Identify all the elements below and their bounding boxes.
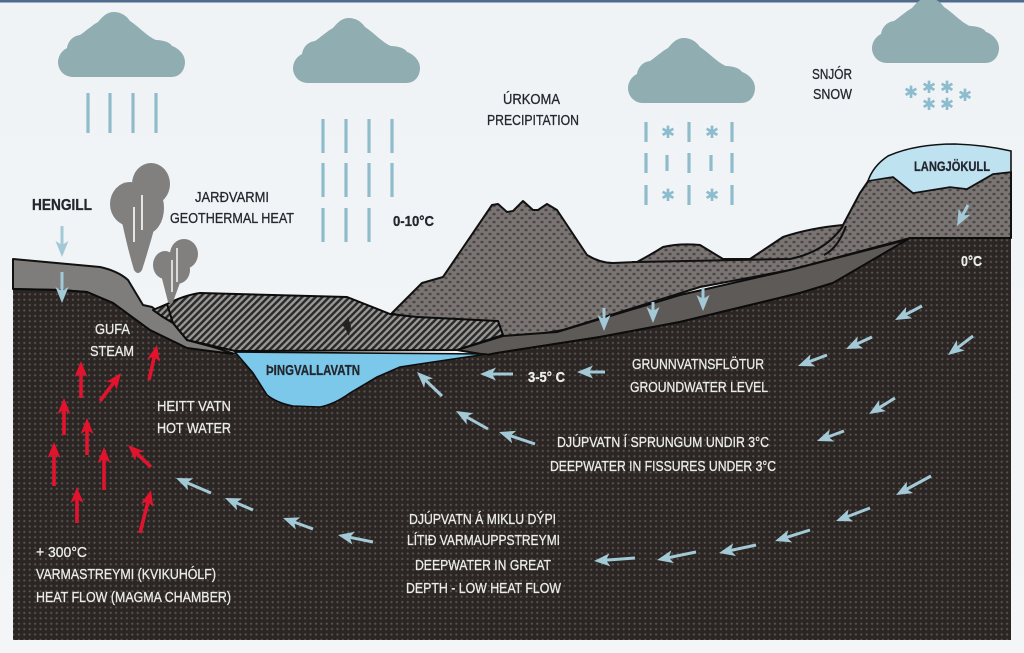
blue arrows: groundwater flow — [176, 306, 973, 561]
snowflakes under cloud 4: ✱ — [904, 83, 918, 103]
label: groundwater level: GRUNNVATNSFLÖTUR — [632, 355, 764, 373]
label: heat flow from magma chamber — [36, 544, 231, 606]
label: geothermal heat — [170, 189, 294, 227]
label: heat flow from magma chamber: HEAT FLOW (MAGMA CHAMBER) — [36, 589, 231, 606]
label: snow: SNOW — [813, 86, 853, 103]
snowflakes under cloud 4 — [904, 78, 972, 115]
label: snow: SNJÓR — [812, 66, 852, 83]
label: precipitation: ÚRKOMA — [503, 91, 560, 108]
glacier: Langjökull ice — [868, 144, 1011, 193]
rain under cloud 2 — [323, 119, 392, 242]
label: deepwater in fissures: DEEPWATER IN FISSURES UNDER 3°C — [550, 458, 776, 475]
label: geothermal heat: GEOTHERMAL HEAT — [170, 210, 294, 227]
label: deepwater in great depth: DEEPWATER IN GREAT — [415, 557, 551, 574]
label: deepwater in fissures: DJÚPVATN Í SPRUNGUM UNDIR 3°C — [557, 434, 769, 451]
label: 0 °C: 0°C — [961, 253, 982, 270]
rain under cloud 1 — [88, 93, 156, 133]
label: hot water — [157, 398, 231, 437]
cloud 1 — [58, 12, 185, 77]
label: hot water: HOT WATER — [157, 420, 231, 437]
snowflakes under cloud 4: ✱ — [922, 95, 936, 115]
label: steam: GUFA — [95, 321, 130, 338]
snowflakes under cloud 4: ✱ — [940, 78, 954, 98]
geothermal steam plume large — [110, 163, 170, 273]
permeable lava band — [457, 239, 910, 355]
red arrows: rising heat — [54, 345, 157, 533]
lake: Þingvallavatn — [235, 352, 487, 407]
label: hot water: HEITT VATN — [157, 398, 231, 415]
snowflakes under cloud 4: ✱ — [940, 95, 954, 115]
lake: Þingvallavatn: ÞINGVALLAVATN — [266, 362, 360, 379]
label: steam — [90, 321, 134, 360]
blue arrows: infiltration — [62, 205, 968, 331]
label: heat flow from magma chamber: + 300°C — [36, 544, 87, 561]
sleet under cloud 3: ✱ — [661, 186, 675, 206]
label: deepwater in great depth: DEPTH - LOW HEAT FLOW — [406, 580, 562, 597]
label: deepwater in great depth: LÍTIÐ VARMAUPPSTREYMI — [407, 532, 560, 549]
cloud 4 — [872, 0, 999, 63]
sleet under cloud 3 — [646, 122, 732, 206]
hatched lava field — [153, 293, 503, 351]
Hengill grey rock layer — [13, 259, 235, 354]
sleet under cloud 3: ✱ — [705, 186, 719, 206]
cloud 2 — [293, 18, 420, 83]
label: geothermal heat: JARÐVARMI — [195, 189, 269, 206]
label: snow — [812, 66, 853, 103]
snowflakes under cloud 4: ✱ — [922, 78, 936, 98]
label: deepwater in fissures — [550, 434, 776, 475]
label: precipitation — [487, 91, 579, 129]
dark bedrock — [13, 238, 1011, 640]
cloud 3 — [628, 38, 755, 103]
ridge contour lines — [632, 226, 846, 262]
mountains and Langjökull rock — [392, 172, 1011, 340]
label: groundwater level: GROUNDWATER LEVEL — [630, 379, 768, 396]
sleet under cloud 3: ✱ — [661, 123, 675, 143]
label: steam: STEAM — [90, 343, 134, 360]
snowflakes under cloud 4: ✱ — [958, 86, 972, 106]
sleet under cloud 3: ✱ — [705, 123, 719, 143]
label: Langjökull: LANGJÖKULL — [914, 158, 990, 174]
label: 0-10 °C: 0-10°C — [393, 213, 434, 230]
label: groundwater level — [630, 355, 768, 396]
fissure mark — [342, 317, 351, 336]
label: 3-5 °C: 3-5° C — [528, 369, 565, 386]
label: precipitation: PRECIPITATION — [487, 112, 579, 129]
geothermal steam plume small — [153, 239, 198, 304]
label: deepwater in great depth: DJÚPVATN Á MIKLU DÝPI — [409, 511, 556, 528]
label: heat flow from magma chamber: VARMASTREYMI (KVIKUHÓLF) — [36, 566, 216, 583]
label: Hengill: HENGILL — [32, 197, 92, 214]
label: deepwater in great depth — [406, 511, 562, 597]
